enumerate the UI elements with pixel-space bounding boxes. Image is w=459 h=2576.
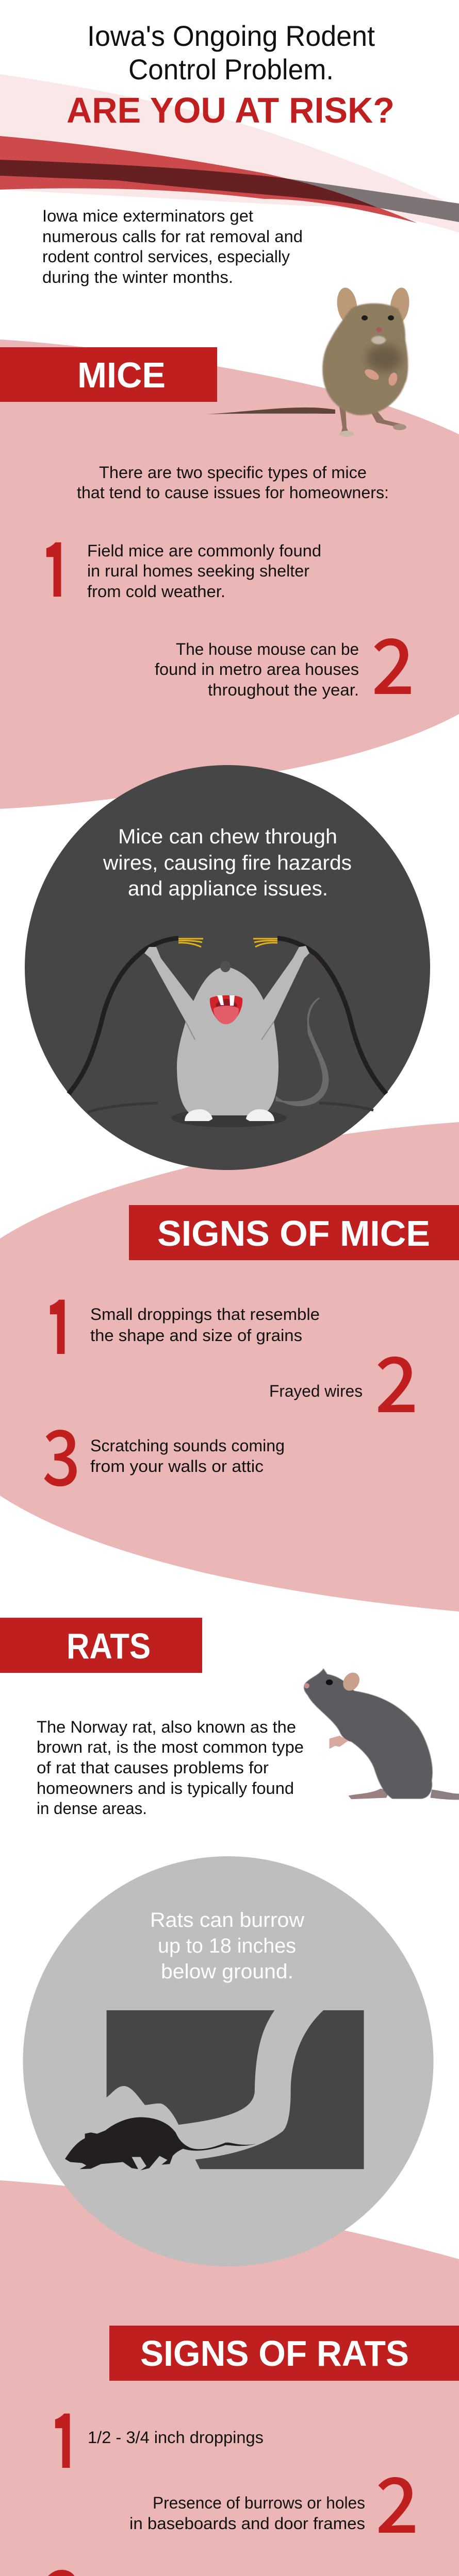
- chew fact text: Mice can chew through: [118, 825, 337, 848]
- title: Control Problem.: [128, 53, 334, 86]
- mouse type 2: 2: [371, 605, 415, 716]
- rats description: in dense areas.: [37, 1799, 147, 1818]
- mice intro text: There are two specific types of mice: [99, 463, 367, 482]
- chew fact text: and appliance issues.: [128, 877, 328, 900]
- mice sign 3: Scratching sounds coming: [90, 1436, 285, 1455]
- mouse type 2: found in metro area houses: [155, 660, 359, 679]
- burrow fact text: below ground.: [161, 1960, 293, 1983]
- signs of rats heading: SIGNS OF RATS: [140, 2333, 409, 2374]
- intro text: [42, 207, 303, 286]
- panel: mice background: [0, 340, 459, 809]
- chew fact text: [103, 825, 352, 900]
- mouse type 2: [155, 605, 415, 716]
- rats sign 1: 1: [50, 2372, 80, 2510]
- intro text: numerous calls for rat removal and: [42, 227, 303, 246]
- mouse type 1: from cold weather.: [87, 582, 225, 601]
- mice sign 1: Small droppings that resemble: [90, 1305, 320, 1324]
- photo: rat: [304, 1668, 459, 1800]
- rats sign 2: in baseboards and door frames: [129, 2514, 365, 2533]
- intro text: during the winter months.: [42, 268, 233, 286]
- burrow fact text: [150, 1909, 304, 1983]
- header swoosh: [0, 74, 459, 232]
- mouse type 2: throughout the year.: [208, 681, 359, 699]
- rats sign 1: [50, 2372, 264, 2510]
- title: Iowa's Ongoing Rodent: [87, 20, 375, 52]
- signs of mice heading: SIGNS OF MICE: [157, 1213, 430, 1253]
- rats description: homeowners and is typically found: [37, 1779, 294, 1798]
- mice sign 2: Frayed wires: [269, 1382, 363, 1400]
- signs of rats heading: [109, 2326, 459, 2381]
- rats heading: [0, 1618, 202, 1673]
- mice sign 1: [44, 1258, 320, 1396]
- title: [67, 20, 395, 130]
- mice intro text: that tend to cause issues for homeowners:: [77, 483, 389, 502]
- mice sign 2: 2: [375, 1324, 418, 1434]
- rats sign 2: 2: [375, 2444, 419, 2555]
- mouse type 1: [41, 501, 321, 639]
- rats sign 1: 1/2 - 3/4 inch droppings: [88, 2428, 264, 2447]
- intro text: Iowa mice exterminators get: [42, 207, 253, 225]
- mice sign 3: 3: [42, 1397, 80, 1507]
- illustration: burrow and rat: [65, 2010, 364, 2171]
- mouse type 1: Field mice are commonly found: [87, 541, 321, 560]
- burrow fact text: Rats can burrow: [150, 1909, 304, 1931]
- mouse type 1: in rural homes seeking shelter: [87, 562, 309, 580]
- rats sign 2: Presence of burrows or holes: [153, 2494, 365, 2512]
- rats sign 2: [129, 2444, 419, 2555]
- mouse type 1: 1: [41, 501, 72, 639]
- illustration: mouse with wires: [69, 938, 386, 1127]
- signs of mice heading: [129, 1205, 459, 1260]
- panel: burrow circle: [23, 1856, 433, 2266]
- mice sign 3: from your walls or attic: [90, 1457, 264, 1476]
- mice sign 3: [42, 1397, 285, 1507]
- title: ARE YOU AT RISK?: [67, 90, 395, 130]
- rats description: of rat that causes problems for: [37, 1758, 269, 1777]
- panel: chewed wires circle: [25, 765, 430, 1170]
- mice heading: MICE: [77, 355, 166, 395]
- rats description: The Norway rat, also known as the: [37, 1718, 296, 1736]
- mice sign 1: 1: [44, 1258, 75, 1396]
- photo: mouse: [206, 286, 412, 437]
- mice heading: [0, 347, 217, 402]
- mice sign 1: the shape and size of grains: [90, 1326, 302, 1345]
- panel: signs of mice background: [0, 1122, 459, 1612]
- intro text: rodent control services, especially: [42, 247, 290, 266]
- rats description: brown rat, is the most common type: [37, 1738, 304, 1756]
- chew fact text: wires, causing fire hazards: [103, 852, 352, 874]
- mouse type 2: The house mouse can be: [176, 640, 359, 658]
- panel: signs of rats background: [0, 2180, 459, 2576]
- rats heading: RATS: [67, 1626, 151, 1666]
- burrow fact text: up to 18 inches: [158, 1935, 296, 1957]
- rats description: [37, 1718, 304, 1818]
- mice intro text: [77, 463, 389, 502]
- mice sign 2: [269, 1324, 418, 1434]
